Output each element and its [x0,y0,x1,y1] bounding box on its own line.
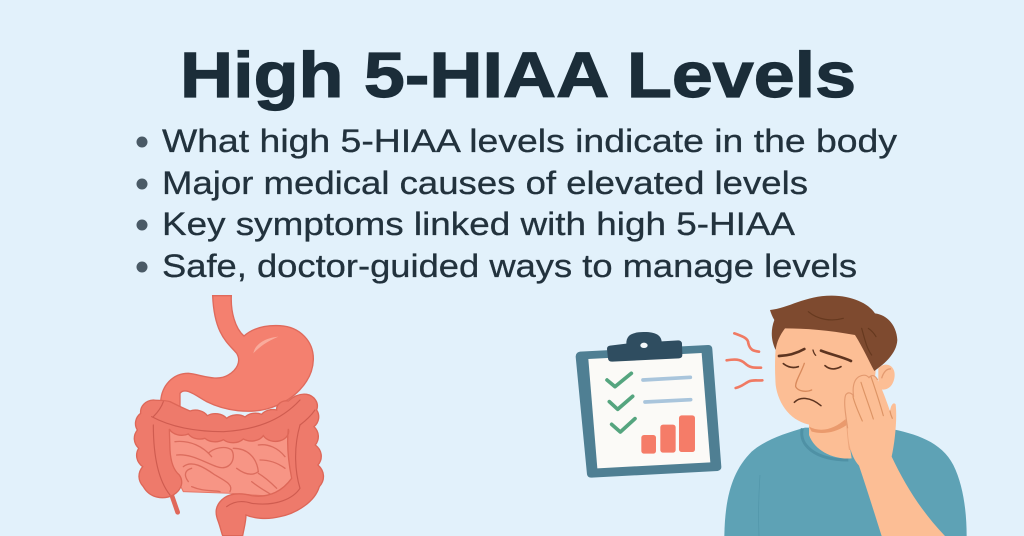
title: High 5-HIAA Levels [180,39,856,111]
icon: person with jaw pain [724,296,967,536]
clip hole [640,343,648,348]
clip [607,332,682,362]
shirt [724,428,967,536]
check marks [607,373,635,432]
bullet 2: Major medical causes of elevated levels [162,165,808,201]
small intestine [168,428,293,497]
facial features [779,349,851,406]
large intestine [134,394,323,536]
stomach and esophagus [161,296,313,411]
pain lines [727,333,762,388]
paper [588,353,710,468]
bullet 3: Key symptoms linked with high 5-HIAA [162,206,796,242]
icon: clipboard [576,332,721,478]
bar chart [641,415,695,454]
clipboard board [576,345,721,478]
face [775,325,876,425]
neck [809,415,852,459]
appendix [172,495,178,512]
hand and forearm [845,375,945,536]
bullet 4: Safe, doctor-guided ways to manage levels [162,248,857,284]
icon: digestive system [134,296,323,536]
text lines [643,377,691,402]
bullet 1: What high 5-HIAA levels indicate in the body [162,123,897,159]
nose [796,363,812,391]
ear [878,365,895,390]
bullet list [136,123,897,284]
hair [770,296,897,371]
